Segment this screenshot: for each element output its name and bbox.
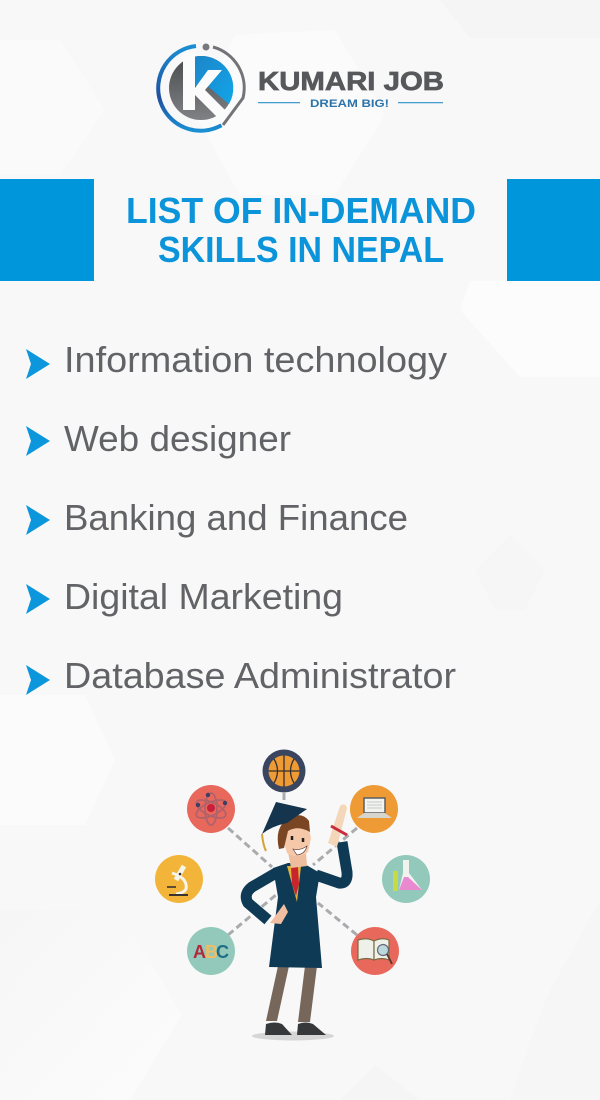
icon: flask (382, 855, 430, 903)
title: LIST OF IN-DEMAND (126, 190, 476, 231)
icon: microscope (155, 855, 203, 903)
icon: ABC (187, 927, 235, 975)
shoes (265, 1022, 292, 1035)
eyes and smile (292, 836, 303, 842)
ground shadow (252, 1032, 334, 1040)
legs (266, 966, 289, 1021)
graduate figure (246, 802, 347, 1035)
icon: ABC: A (193, 942, 206, 962)
title: SKILLS IN NEPAL (158, 229, 444, 270)
icon: book with magnifier (351, 927, 399, 975)
right blue block (507, 179, 600, 281)
logo tagline: DREAM BIG! (310, 98, 389, 110)
face (281, 822, 311, 856)
right arm (316, 842, 347, 883)
collar and tie (287, 866, 301, 902)
logo: Kumari Job (158, 44, 444, 131)
logo wordmark: KUMARI JOB (258, 66, 444, 96)
list item: Digital Marketing: Digital Marketing (64, 576, 343, 617)
icon: ABC: C (216, 942, 229, 962)
neck (288, 852, 307, 868)
hand on hip (270, 904, 288, 924)
icon: atom (187, 785, 235, 833)
skills list (26, 339, 456, 696)
dashed connectors (228, 793, 357, 935)
hair (278, 815, 310, 849)
left blue block (0, 179, 94, 281)
diploma (328, 804, 347, 847)
graduation cap (262, 802, 307, 834)
icon: basketball (262, 750, 306, 792)
list item: Information technology: Information technology (64, 339, 447, 380)
icon: laptop (350, 785, 398, 833)
list item: Banking and Finance: Banking and Finance (64, 497, 408, 538)
icon: ABC: B (205, 942, 218, 962)
icon: K emblem (158, 44, 244, 131)
gown (269, 863, 322, 968)
list item: Web designer: Web designer (64, 418, 291, 459)
left arm (246, 873, 276, 920)
list item: Database Administrator: Database Administrator (64, 655, 456, 696)
illustration: graduate with subject icons (155, 750, 430, 1040)
